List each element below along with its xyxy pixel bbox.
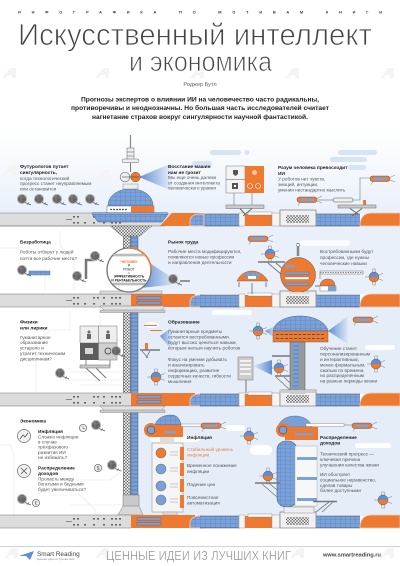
row 1 tower [92,135,172,236]
text: unemployment [20,238,77,261]
magnifier [107,248,151,292]
title: и экономика [129,46,272,77]
inflation labels: инфляции [187,469,210,474]
platform row 3 [100,406,165,412]
text: education: Гуманитарные предметы [168,329,223,334]
clouds in row 1 [192,150,377,170]
robots row 1 [17,194,99,205]
text: unemployment: Безработица [20,238,51,246]
author: Роджер Бутл [183,82,217,88]
text: education [168,318,241,384]
text: labor market: Рабочие места модифицируются, [168,249,241,254]
text: education: остаются востребованными. [168,334,230,340]
text: economy: в случае [38,440,57,444]
text: skills: профессии, где нужны [320,255,370,260]
lead paragraph [71,96,329,121]
economy icons: $ [97,466,100,472]
footer slogan: ЦЕННЫЕ ИДЕИ ИЗ ЛУЧШИХ КНИГ [106,549,291,563]
band 3 [0,390,400,406]
text: distribution [320,435,379,493]
economy icons: € [35,501,38,507]
platforms around magnifier [100,291,165,312]
inflation labels: Повсеместная [187,495,219,500]
text: distribution: сделав товары [320,483,353,488]
spire [122,135,139,172]
text: learning [320,346,377,384]
clouds on blue panels [150,240,395,455]
logo: Smart Reading [37,551,80,558]
magnifier: = [128,272,130,276]
central column [118,226,143,516]
robot distribution right [374,492,392,508]
economy robots [17,420,121,505]
header line: ИНФОГРАФИКА ПО МОТИВАМ КНИГИ [18,10,382,14]
attached dome [320,279,335,286]
text: mind exceeds: У роботов нет чувств, [278,176,325,182]
text: uprising: нам не грозит [168,171,201,176]
text: labor market: появляются новые профессии [168,254,235,260]
side panel and robot education [238,356,290,393]
row 2 right machines [168,235,383,294]
text: education: и анализировать [168,362,205,368]
machine row 1 right [297,175,395,216]
logo [19,551,80,561]
robot education right [367,356,385,372]
text: physicists: Физики [20,320,38,326]
ladder [320,271,363,274]
background: row 2 right panel [138,226,400,294]
disk [92,214,168,222]
text: education: информацию, развитие [168,368,220,373]
orange ball [131,172,140,182]
inflation labels: Стабильный уровень [187,446,234,452]
text: futurologists [20,164,92,192]
text: physicists: дисциплинам? [20,356,52,362]
gray ball [120,172,130,182]
text: learning: но распределенным [320,373,364,378]
mast [297,243,299,256]
inflation labels: Инфляция [187,434,212,441]
text: physicists: образование [20,340,48,345]
text: mind exceeds [278,165,348,192]
text: distribution: улучшения качества жизни [320,462,379,468]
text: learning: и интерактивным, [320,357,359,362]
inflation dome [144,415,226,437]
robots row 2 left [17,251,104,282]
text: learning: Обучение станет [320,346,358,351]
inflation labels: Временное понижение [187,463,237,468]
magnifier: РОБОТ [123,268,135,272]
text: economy: Пропасть между [38,476,75,482]
magnifier: И РЕНТАБЕЛЬНОСТЬ [111,278,147,282]
inflation labels: Падение цен [187,482,216,487]
text: uprising [168,164,220,190]
big dome education [249,316,378,393]
text: education: Фокус на умении добывать [168,357,227,362]
text: distribution: доходов [320,442,340,446]
inflation labels [187,434,237,506]
inflation labels: инфляции [187,452,210,458]
background: row 1 sky [0,130,400,214]
large orange sphere [280,258,316,292]
magnifier: ЭФФЕКТИВНОСТЬ [114,274,145,278]
robots row 3 left [55,346,125,379]
text: skills [320,249,374,266]
text: economy [20,418,86,492]
background: row 3 right panel [138,306,400,394]
distribution tower [240,416,377,513]
text: unemployment: Роботы отберут у людей [20,248,74,254]
lead paragraph: противоречивы и неоднозначны. Но большая часть исследователей считает [71,104,329,112]
circuit decoration [0,230,123,515]
text: education: которым нельзя научить роботов [168,346,241,350]
text: distribution: Технический прогресс — [320,450,374,456]
text: physicists [20,320,65,362]
band 4 [0,512,400,528]
text: education: Образование [168,318,200,326]
text: education: сердечных качеств, гибкости [168,374,231,378]
small dome with legs [237,271,268,281]
text: economy: Сложно инфляция [38,434,79,440]
robot on line [168,274,182,285]
text: distribution: ИИ обостряет [320,472,351,477]
text: economy: доходов [38,472,58,477]
text: physicists: утратит техническим [20,351,65,356]
text: futurologists: сингулярность, [20,171,58,176]
inflation panel [152,437,184,515]
text: labor market: Рынок труда [168,240,199,246]
text: futurologists: прогресс станет неуправляемым [20,181,92,186]
text: physicists: устарело и [20,346,44,350]
text: economy: развития ИИ [38,450,66,455]
dome [108,189,153,206]
magnifier: ≠ [128,264,130,268]
flying drone [248,235,273,244]
text: education: Будут высоко цениться навыки, [168,340,237,345]
text: mind exceeds: Разум человека превосходит [278,165,348,171]
text: learning: сжатым по времени, [320,368,365,373]
footer rule [0,546,400,548]
dome base [107,206,154,213]
text: education: мышления [168,379,192,384]
tile grid row 3 [80,326,117,381]
text: physicists: Гуманитарное [20,335,51,340]
text: uprising: от создания интеллекта [168,180,220,186]
text: uprising: Мы еще очень далеки [168,175,217,180]
lattice [110,226,152,236]
lead paragraph: Прогнозы экспертов о влиянии ИИ на человечество часто радикальны, [81,96,319,104]
observation cone [139,163,172,191]
text: mind exceeds: умения нестандартно мыслить [278,188,346,192]
lead paragraph: нагнетание страхов вокруг сингулярности научной фантастикой. [92,113,308,121]
text: economy: Распределение [38,466,75,472]
text: mind exceeds: эмоций, интуиции, [278,181,318,187]
text: economy: Инфляция [38,428,63,435]
text: distribution: более доступными [320,488,361,493]
text: labor market [168,240,241,265]
text: unemployment: почти все рабочие места? [20,256,77,261]
magnifier cone [140,262,176,288]
education icons left [140,322,172,385]
text: economy: Экономика [20,418,46,424]
text: mind exceeds: ИИ [278,171,285,177]
logo: Ценные идеи из лучших книг [37,557,75,561]
text: economy: богатыми и бедными [38,482,84,486]
text: uprising: человеческого уровня [168,186,216,190]
website: www.smartreading.ru [322,552,381,558]
text: distribution: социальное неравенство, [320,478,376,482]
text: distribution: ключевая причина [320,457,361,462]
text: learning: персонализированным [320,352,370,356]
text: skills: человеческие навыки [320,261,367,266]
inflation labels: автоматизация [187,500,220,506]
text: futurologists: Футурологов путает [20,164,69,170]
magnifier: ЧЕЛОВЕК [121,260,138,264]
text: economy: будет увеличиваться? [38,487,86,492]
text: futurologists: или остановится [20,186,57,192]
text: economy: не избежать? [38,455,68,460]
robot on shelf [261,246,279,262]
text: distribution: Распределение [320,435,357,441]
text: skills: Востребованными будут [320,249,374,254]
text: economy: трёхфазового [38,444,68,450]
text: labor market: и направления деятельности [168,260,232,265]
text: futurologists: когда технологический [20,175,70,181]
text: learning: менее формальным, [320,362,366,368]
title [18,18,372,77]
text: learning: на разные периоды жизни [320,378,377,384]
band 1 [0,210,400,226]
background: row 4 right panel [138,406,400,516]
economy icons [18,424,102,507]
icon tile grid row 1 [226,166,264,216]
text: physicists: или лирики [20,326,48,332]
text: uprising: Восстание машин [168,164,211,170]
band 2 [0,291,400,307]
title: Искусственный интеллект [18,18,372,52]
